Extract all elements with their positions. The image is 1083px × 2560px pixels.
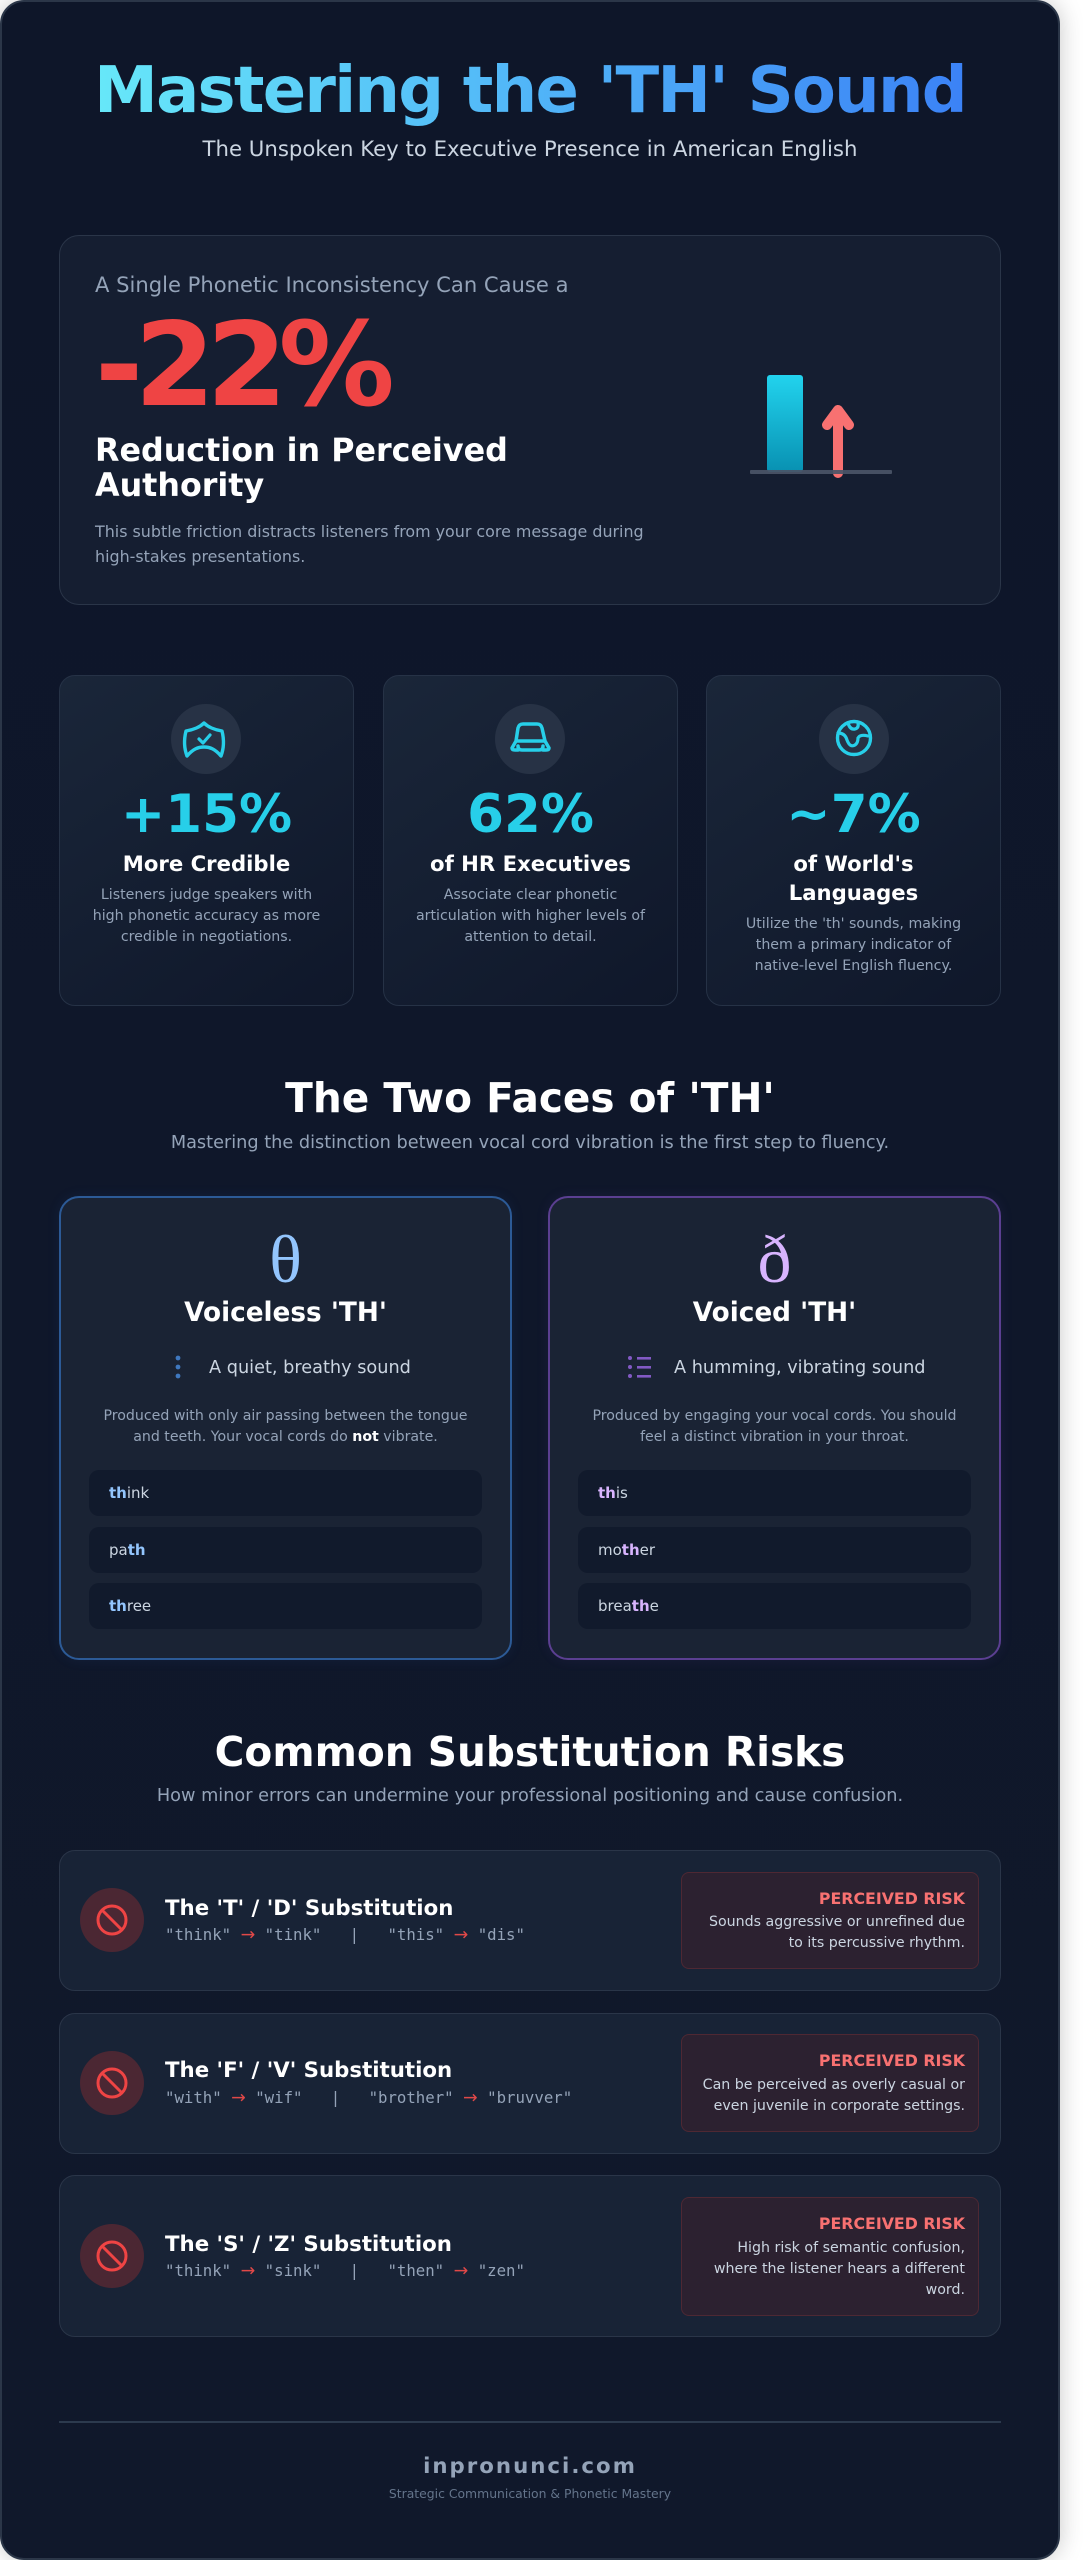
panel: voiced TH (548, 1196, 1001, 1660)
stat description (93, 887, 320, 945)
risk text: to its percussive rhythm. (789, 1935, 965, 1951)
substitution examples: "think" → "tink" | "this" → "dis" (165, 1925, 525, 1945)
hero description: high-stakes presentations. (95, 547, 305, 566)
stat label: of World's (793, 851, 914, 876)
hero heading: Authority (95, 468, 264, 504)
voiceless word: three (89, 1583, 482, 1629)
risk callout (681, 1872, 979, 1969)
voiced word: breathe: breathe (598, 1597, 659, 1615)
title: Mastering the 'TH' Sound (94, 54, 966, 128)
stat label: Languages (789, 880, 918, 905)
stat value: 62% (467, 784, 594, 845)
risk text: where the listener hears a different (714, 2261, 965, 2277)
heading: two faces: The Two Faces of 'TH' (285, 1074, 775, 1122)
risk callout (681, 2197, 979, 2316)
voiced descriptor: A humming, vibrating sound (674, 1358, 926, 1378)
risk text: word. (926, 2282, 965, 2298)
footer brand: inpronunci.com (423, 2454, 637, 2479)
icon: globe (819, 704, 889, 774)
icon: vibration list (628, 1356, 651, 1378)
stat description (746, 916, 961, 974)
stat label: of HR Executives (430, 851, 631, 876)
voiceless description (104, 1408, 468, 1445)
substitution title: The 'F' / 'V' Substitution (165, 2058, 452, 2083)
risk text (703, 2077, 965, 2114)
voiceless word: think (89, 1470, 482, 1516)
voiced word: mother (578, 1527, 971, 1573)
stat description: credible in negotiations. (121, 929, 292, 945)
voiceless title: Voiceless 'TH' (184, 1298, 387, 1328)
stat description: Utilize the 'th' sounds, making (746, 916, 961, 932)
panel: credibility stat (59, 675, 354, 1006)
voiced description: feel a distinct vibration in your throat. (640, 1429, 909, 1445)
hero number: -22% (95, 298, 386, 433)
hero lead-in: A Single Phonetic Inconsistency Can Cause a (95, 272, 569, 297)
voiced word: breathe (578, 1583, 971, 1629)
substitution title: The 'T' / 'D' Substitution (165, 1896, 453, 1921)
stat label: More Credible (123, 851, 290, 876)
risk label: PERCEIVED RISK (819, 2214, 965, 2233)
icon: breath dots (176, 1356, 180, 1378)
substitution examples: "think" → "sink" | "then" → "zen" (165, 2261, 525, 2281)
phonetic symbol eth: ð (758, 1221, 792, 1297)
voiced description (592, 1408, 956, 1445)
voiceless description: and teeth. Your vocal cords do not vibrate. (133, 1429, 438, 1445)
stat label (789, 851, 918, 905)
voiceless word: think: think (109, 1484, 149, 1502)
subtitle: The Unspoken Key to Executive Presence in American English (203, 137, 857, 162)
voiced word: mother: mother (598, 1541, 655, 1559)
voiced word: this (578, 1470, 971, 1516)
substitution title: The 'S' / 'Z' Substitution (165, 2232, 452, 2257)
risk label: PERCEIVED RISK (819, 2051, 965, 2070)
icon: prohibition (80, 1888, 144, 1952)
hero heading: Reduction in Perceived (95, 433, 508, 469)
panel: hero statistic (59, 235, 1001, 605)
risk text (709, 1914, 965, 1951)
stat description: Listeners judge speakers with (101, 887, 312, 903)
hero description (94, 522, 644, 566)
stat description (416, 887, 646, 945)
risk callout (681, 2034, 979, 2132)
substitution examples: "with" → "wif" | "brother" → "bruvver" (165, 2088, 572, 2108)
stat description: high phonetic accuracy as more (93, 908, 320, 924)
panel: voiceless TH (59, 1196, 512, 1660)
heading: substitution risks: Common Substitution Risks (215, 1728, 845, 1776)
hero description: This subtle friction distracts listeners from your core message during (95, 522, 644, 541)
risk text: Sounds aggressive or unrefined due (709, 1914, 965, 1930)
icon: boxed device (495, 704, 565, 774)
voiced description: Produced by engaging your vocal cords. You should (592, 1408, 956, 1424)
footer tagline: Strategic Communication & Phonetic Mastery (389, 2486, 671, 2501)
risk label: PERCEIVED RISK (819, 1889, 965, 1908)
panel: HR executives stat (383, 675, 678, 1006)
stat value: +15% (121, 784, 292, 845)
section subtitle: Mastering the distinction between vocal cord vibration is the first step to fluency. (171, 1133, 889, 1153)
risk text: High risk of semantic confusion, (737, 2240, 965, 2256)
voiced title: Voiced 'TH' (693, 1298, 856, 1328)
voiceless descriptor: A quiet, breathy sound (209, 1358, 411, 1378)
risk text: even juvenile in corporate settings. (714, 2098, 965, 2114)
voiceless word: three: three (109, 1597, 151, 1615)
stat value: ~7% (786, 784, 921, 845)
stat description: them a primary indicator of (756, 937, 951, 953)
stat description: articulation with higher levels of (416, 908, 645, 924)
hero heading (95, 433, 508, 504)
stat description: Associate clear phonetic (444, 887, 617, 903)
voiced word: this: this (598, 1484, 628, 1502)
phonetic symbol theta: θ (269, 1221, 302, 1297)
panel: F/V substitution (59, 2013, 1001, 2154)
footer rule (59, 2421, 1001, 2423)
risk text (714, 2240, 965, 2298)
voiceless word: path (89, 1527, 482, 1573)
stat description: attention to detail. (464, 929, 597, 945)
stat description: native-level English fluency. (755, 958, 952, 974)
chart: bar and arrow (750, 375, 892, 478)
panel: world languages stat (706, 675, 1001, 1006)
panel: S/Z substitution (59, 2175, 1001, 2337)
risk text: Can be perceived as overly casual or (703, 2077, 965, 2093)
panel: T/D substitution (59, 1850, 1001, 1991)
section subtitle: How minor errors can undermine your professional positioning and cause confusion. (157, 1786, 903, 1806)
voiceless description: Produced with only air passing between the tongue (104, 1408, 468, 1424)
icon: shield check (171, 704, 241, 774)
voiceless word: path: path (109, 1541, 146, 1559)
